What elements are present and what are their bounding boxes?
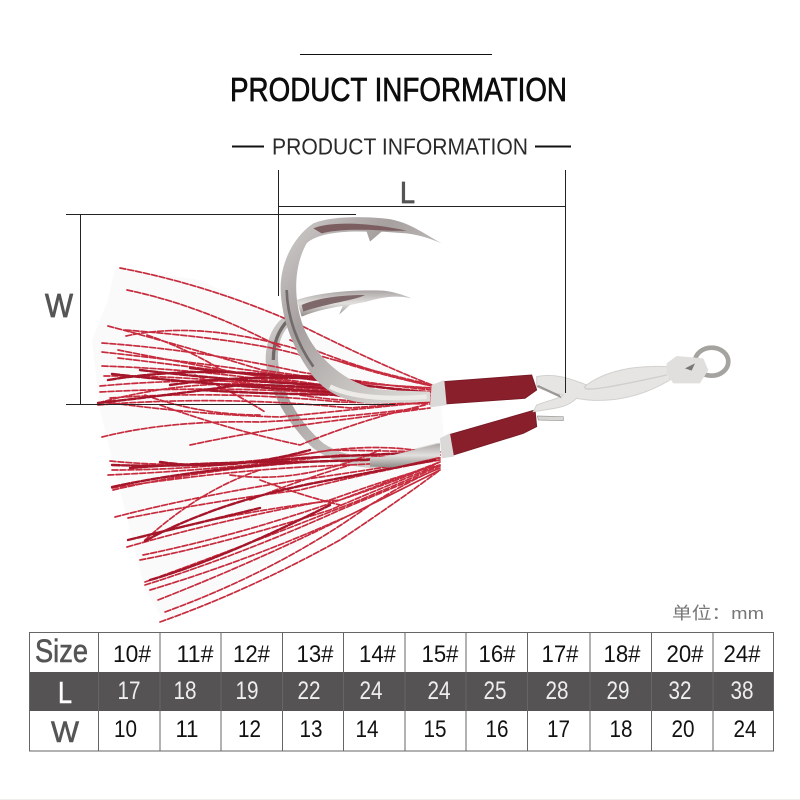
row: L: 19: [236, 677, 258, 705]
row: W: 24: [734, 716, 756, 743]
row: Size: Size: [35, 633, 88, 669]
row: W: 17: [547, 716, 570, 743]
row: Size: 14#: [359, 641, 397, 668]
row: Size: 24#: [724, 641, 761, 668]
title: PRODUCT INFORMATION: [230, 71, 567, 108]
row: W: W: [51, 716, 80, 749]
row: W: 16: [486, 716, 508, 743]
row: W: 12: [238, 716, 261, 743]
row: Size: 16#: [478, 641, 516, 668]
row: L: 25: [484, 677, 506, 705]
size table: [30, 632, 774, 751]
front hook: [281, 217, 442, 404]
subtitle with side rules: PRODUCT INFORMATION: [272, 134, 528, 160]
row: L: 29: [606, 677, 630, 705]
row: L: [58, 675, 754, 710]
row: L: 24: [360, 677, 383, 705]
rear hook shank over flash: [370, 443, 440, 467]
rope loop and solid ring: [533, 348, 728, 421]
row: L: 28: [546, 677, 568, 705]
row: Size: 12#: [233, 641, 271, 668]
row: L: 38: [730, 677, 754, 705]
row: L: 17: [118, 677, 140, 705]
row: W: 18: [610, 716, 632, 743]
unit label: 单位：mm: [672, 604, 764, 623]
product photo: assist hooks with red flash: [92, 217, 728, 622]
row: W: 10: [114, 716, 137, 743]
row: Size: 13#: [296, 641, 334, 668]
dimension W: W: [45, 287, 74, 324]
row: Size: [35, 633, 761, 669]
row: L: 18: [174, 677, 196, 705]
row: Size: 10#: [113, 641, 152, 668]
dark L row: [30, 672, 774, 711]
row: W: 20: [672, 716, 694, 743]
fan backdrop: [92, 268, 445, 622]
rear hook lower bend: [266, 315, 440, 469]
row: W: 13: [300, 716, 322, 743]
row: L: 24: [428, 677, 451, 705]
rear hook point: [297, 290, 412, 317]
row: Size: 11#: [176, 641, 214, 668]
row: Size: 18#: [604, 641, 641, 668]
thread wraps and white bands: [430, 375, 537, 458]
dimension L: L: [400, 175, 415, 210]
red flash strands, lower bundle: [108, 408, 440, 622]
row: L: 22: [298, 677, 320, 705]
row: Size: 17#: [542, 641, 579, 668]
row: L: 32: [668, 677, 692, 705]
red flash strands, upper bundle: [98, 268, 432, 445]
row: Size: 20#: [666, 641, 704, 668]
row: Size: 15#: [422, 641, 459, 668]
row: W: 11: [176, 716, 198, 743]
row: W: 14: [356, 716, 378, 743]
table grid: [30, 632, 774, 751]
row: W: 15: [424, 716, 446, 743]
row: L: L: [58, 675, 72, 710]
row: W: [51, 716, 756, 749]
